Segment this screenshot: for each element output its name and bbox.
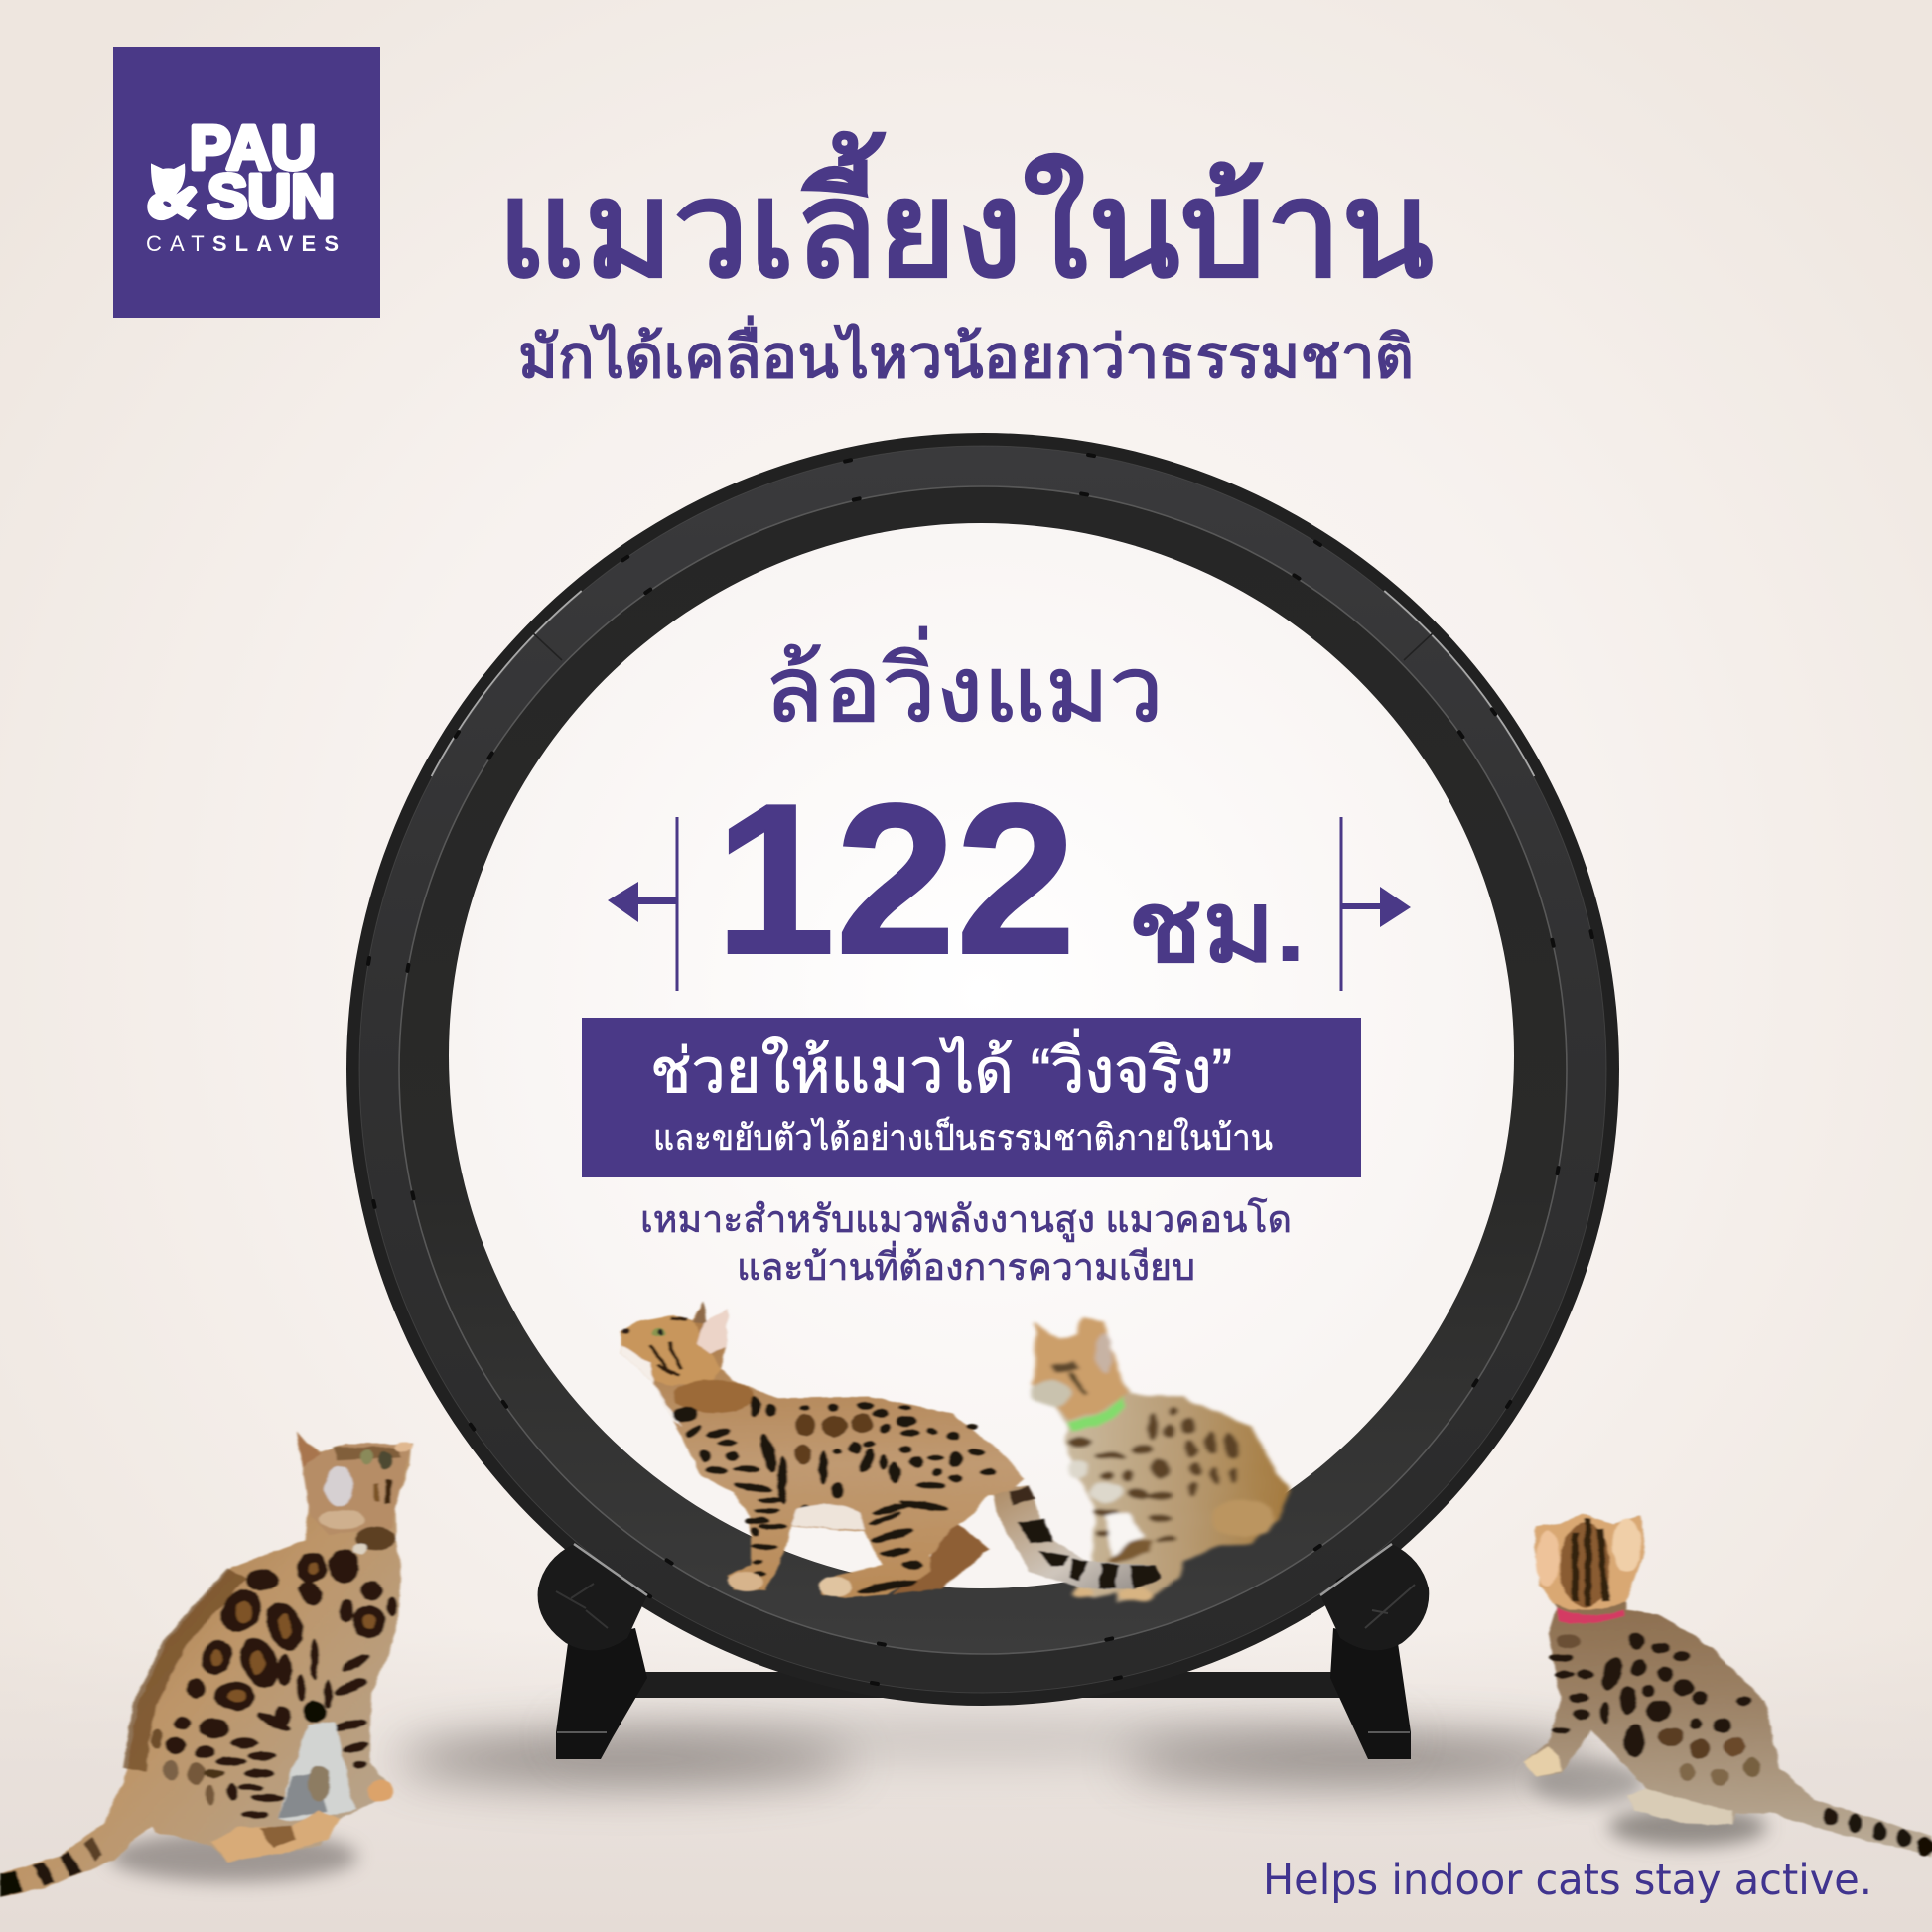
- paws: [728, 1572, 764, 1591]
- logo icon: cat ampersand: [147, 163, 198, 220]
- face stripes: [650, 1318, 687, 1377]
- shadow: left cat: [109, 1831, 357, 1882]
- unit: ชม.: [1128, 872, 1306, 983]
- head: [1033, 1316, 1127, 1420]
- wheel mount right: [1320, 1544, 1429, 1650]
- wheel inner opening: [449, 523, 1514, 1588]
- suitability text: และบ้านที่ต้องการความเงียบ: [737, 1241, 1195, 1289]
- dimension marker left: [608, 817, 679, 991]
- paws: [211, 1810, 340, 1862]
- back shading: [134, 1573, 237, 1770]
- diameter value: 122: [715, 759, 1076, 999]
- rump and hind foot: [1211, 1500, 1275, 1537]
- spots: [1068, 1407, 1242, 1542]
- paws: [1628, 1788, 1732, 1825]
- wheel slots: [366, 453, 1599, 1686]
- rosettes: [152, 1549, 397, 1819]
- floor shadows under wheel: [397, 1718, 1598, 1783]
- running wheel: [346, 433, 1619, 1706]
- wheel mount left: [538, 1544, 647, 1650]
- wheel crossbar and legs: [556, 1628, 1411, 1759]
- body and head outline: [621, 1300, 1024, 1598]
- collar: [1067, 1397, 1125, 1432]
- belly fur: [791, 1504, 865, 1530]
- rear hind leg: [892, 1522, 990, 1594]
- logo: [113, 47, 380, 318]
- neck fur: [673, 1380, 756, 1413]
- eye: [651, 1328, 665, 1337]
- cat: centre left, running: [621, 1300, 1161, 1598]
- small dark spots: [673, 1396, 997, 1597]
- rim highlights: [432, 591, 582, 776]
- logo wordmark PAU: PAU: [190, 114, 316, 183]
- spots: [1549, 1633, 1932, 1856]
- head: [301, 1444, 412, 1535]
- footer caption: Helps indoor cats stay active.: [1263, 1856, 1872, 1905]
- wheel heading: ล้อวิ่งแมว: [764, 626, 1164, 741]
- dimension marker right: [1340, 817, 1411, 991]
- subtitle: มักได้เคลื่อนไหวน้อยกว่าธรรมชาติ: [518, 315, 1414, 390]
- suitability text: [640, 1197, 1292, 1289]
- cat: right, sitting with pink collar: [1523, 1514, 1932, 1857]
- banner headline: ช่วยให้แมวได้ “วิ่งจริง”: [650, 1029, 1232, 1106]
- head: [621, 1315, 721, 1387]
- title: แมวเลี้ยงในบ้าน: [497, 130, 1434, 305]
- shadow: right cat: [1531, 1760, 1767, 1847]
- banner subtext: และขยับตัวได้อย่างเป็นธรรมชาติภายในบ้าน: [653, 1115, 1273, 1158]
- tail: [992, 1485, 1161, 1589]
- rim joints: [532, 632, 1434, 660]
- callout banner: [582, 1018, 1361, 1177]
- chest patch: [278, 1722, 355, 1822]
- logo tagline: CAT SLAVES: [146, 231, 339, 256]
- cat: centre right, with green collar: [1031, 1316, 1289, 1603]
- cat: left, sitting: [0, 1432, 412, 1896]
- collar: [1557, 1608, 1624, 1624]
- suitability text: เหมาะสำหรับแมวพลังงานสูง แมวคอนโด: [640, 1197, 1292, 1242]
- tail stripes: [0, 1838, 102, 1896]
- gap between legs: [1106, 1512, 1143, 1555]
- logo wordmark SUN: SUN: [207, 163, 335, 231]
- ears: [692, 1300, 707, 1323]
- head: [1534, 1514, 1644, 1610]
